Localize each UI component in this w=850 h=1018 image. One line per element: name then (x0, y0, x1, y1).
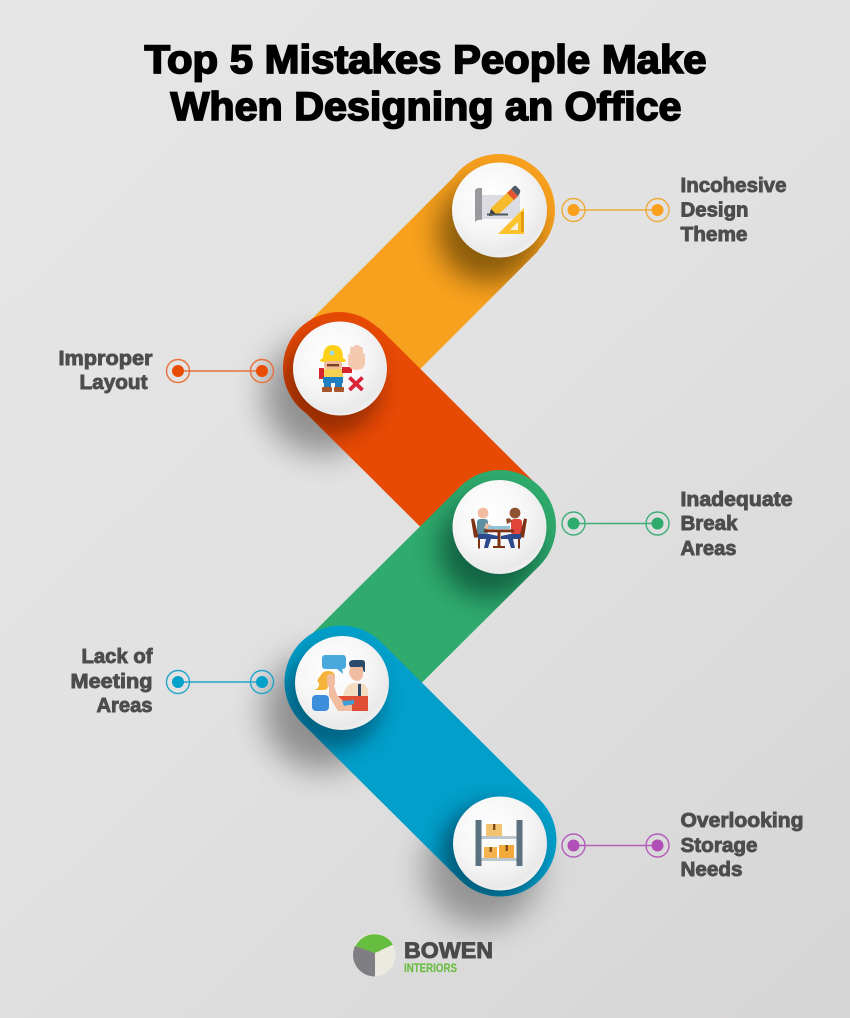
label: lack of meeting areas: Meeting (70, 670, 152, 693)
label: inadequate break areas: Areas (680, 537, 736, 560)
node: design theme (452, 162, 547, 258)
label: overlooking storage needs: Needs (680, 858, 742, 881)
logo: Bowen Interiors (352, 934, 493, 977)
logo wordmark (404, 938, 493, 975)
band: blue (282, 626, 556, 904)
icon: two people talking (312, 655, 368, 711)
connector: purple (562, 834, 669, 857)
label: inadequate break areas: Inadequate (680, 488, 792, 511)
label: lack of meeting areas: Lack of (82, 645, 153, 668)
logo wordmark: INTERIORS (404, 963, 457, 975)
label: incohesive design theme: Design (680, 198, 748, 222)
label: lack of meeting areas: Areas (96, 694, 152, 717)
label: overlooking storage needs (680, 809, 804, 881)
white disc (452, 480, 546, 574)
node: break areas (452, 480, 546, 574)
logo wordmark: BOWEN (404, 938, 493, 963)
connector: blue (166, 670, 274, 694)
icon: shelf with boxes (476, 820, 522, 866)
logo mark (352, 934, 396, 977)
title: When Designing an Office (170, 85, 682, 129)
white disc (295, 636, 389, 730)
connector: red (166, 360, 274, 382)
connector: orange (562, 198, 669, 222)
label: improper layout: Improper (58, 347, 153, 370)
white disc (453, 796, 547, 890)
node: storage needs (453, 796, 547, 890)
band: orange (310, 154, 555, 369)
white disc (293, 322, 387, 416)
label: incohesive design theme: Incohesive (680, 174, 786, 197)
icon: blueprint with pencil and set square (475, 186, 524, 234)
label: inadequate break areas (680, 488, 792, 560)
band: green (312, 470, 556, 683)
icon: builder with stop hand (319, 345, 365, 392)
label: incohesive design theme: Theme (680, 223, 748, 246)
label: lack of meeting areas (70, 645, 153, 717)
white disc (452, 162, 547, 258)
node: improper layout (293, 322, 387, 416)
icon: two people at a table (471, 508, 527, 548)
label: overlooking storage needs: Overlooking (680, 809, 804, 832)
band: red (283, 312, 534, 526)
title (144, 38, 706, 129)
label: improper layout (58, 347, 153, 394)
label: inadequate break areas: Break (680, 512, 738, 535)
title: Top 5 Mistakes People Make (144, 38, 706, 82)
connector: green (562, 512, 669, 535)
label: overlooking storage needs: Storage (680, 834, 758, 857)
label: improper layout: Layout (80, 371, 148, 394)
ground shadows (264, 338, 540, 926)
label: incohesive design theme (680, 174, 786, 246)
node: meeting areas (295, 636, 389, 730)
